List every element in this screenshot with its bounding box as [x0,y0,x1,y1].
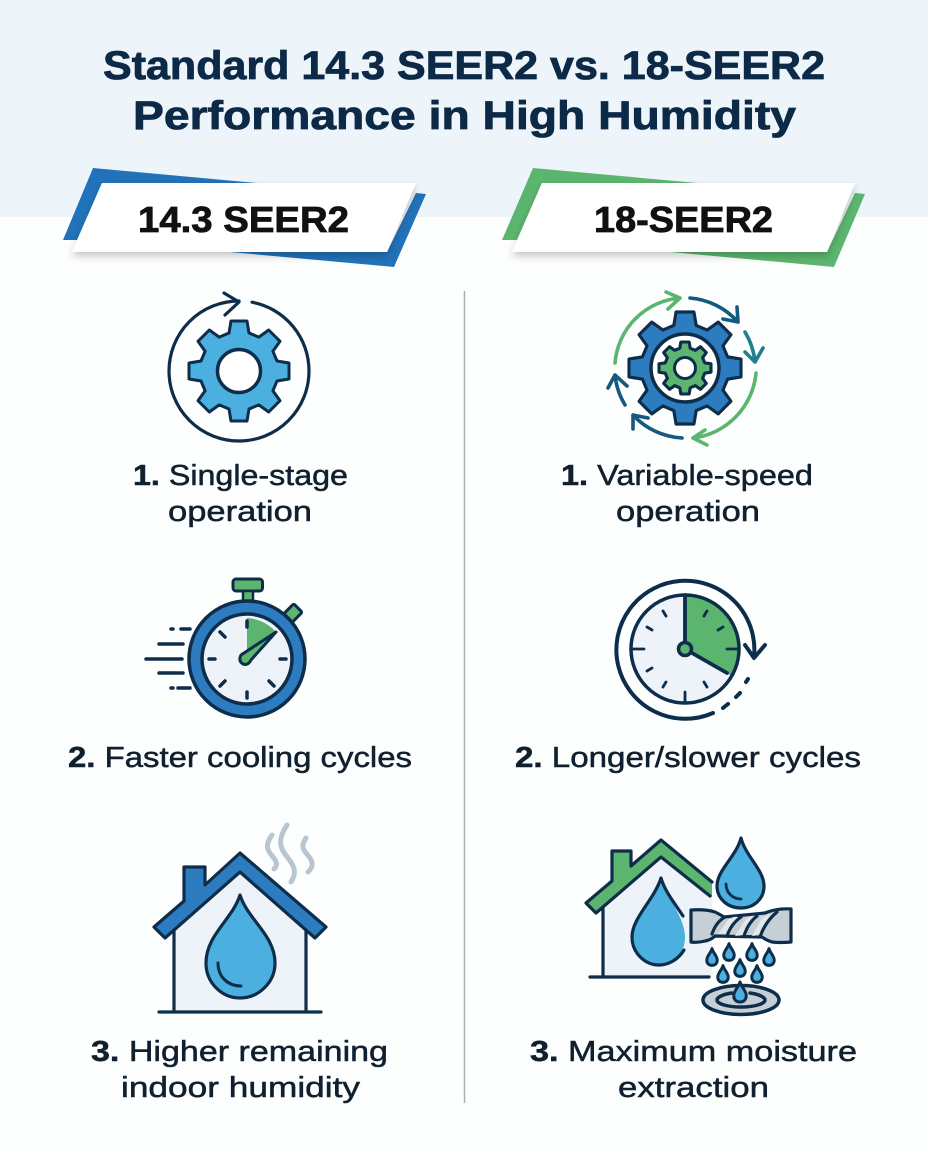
label: maximum moisture extraction: 3. Maximum moisture [530,1036,857,1068]
label: maximum moisture extraction [530,1036,857,1104]
label: variable-speed operation: operation [616,496,760,528]
label: maximum moisture extraction: extraction [618,1072,769,1104]
icon: single-stage gear with circular arrow [169,293,309,441]
title: Performance in High Humidity [133,94,797,138]
label: faster cooling cycles: 2. Faster cooling cycles [68,742,412,774]
label: higher remaining indoor humidity: indoor humidity [121,1072,361,1104]
banner: 14.3 SEER2: 14.3 SEER2 [138,199,349,240]
label: single-stage operation: 1. Single-stage [133,460,348,492]
banner: 18-SEER2: 18-SEER2 [594,199,773,240]
label: higher remaining indoor humidity: 3. Higher remaining [91,1036,388,1068]
label: longer/slower cycles: 2. Longer/slower cycles [515,742,861,774]
icon: clock with long cycle arrow [616,581,765,719]
label: variable-speed operation: 1. Variable-speed [561,460,813,492]
label: variable-speed operation [561,460,813,528]
banner: 18-SEER2 [502,168,865,267]
icon: stopwatch with speed lines [146,579,305,717]
icon: house with humidity drop and vapor [154,825,326,1012]
banner: 14.3 SEER2 [63,168,426,267]
title [103,44,825,138]
label: single-stage operation [133,460,348,528]
label: single-stage operation: operation [168,496,312,528]
title: Standard 14.3 SEER2 vs. 18-SEER2 [103,44,825,88]
label: higher remaining indoor humidity [91,1036,388,1104]
icon: variable-speed gears with arrows [608,292,763,445]
icon: house with wringing towel and drops [586,838,791,1014]
